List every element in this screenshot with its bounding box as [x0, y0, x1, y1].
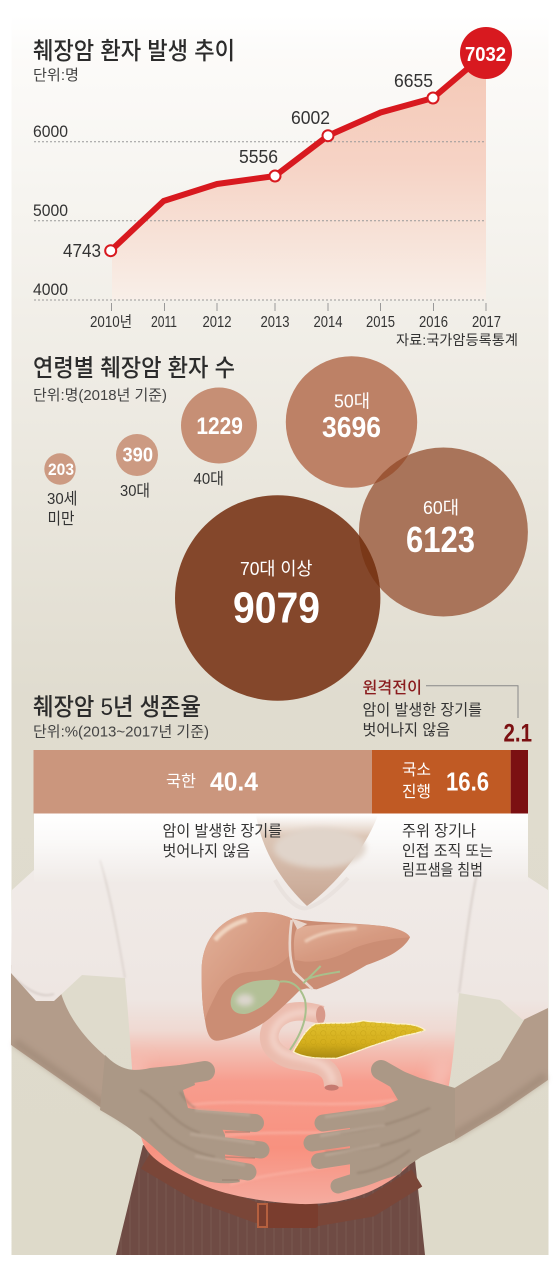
bubble: 30s: 30대 — [120, 482, 150, 500]
neck and chin — [256, 815, 378, 908]
description: localized: 암이 발생한 장기를 — [162, 822, 282, 840]
bubble: under 30 — [44, 453, 78, 528]
bile duct — [280, 966, 340, 1050]
y axis labels: 4000 — [33, 281, 68, 299]
callout: distant metastasis: 벗어나지 않음 — [362, 721, 450, 739]
pancreas — [293, 1021, 425, 1058]
title: 췌장암 5년 생존율 — [33, 694, 201, 721]
photo: man holding his abdomen with organ illustration — [11, 813, 548, 1255]
data values: 5556 — [239, 146, 278, 167]
callout: distant metastasis: 원격전이 — [362, 679, 422, 697]
y axis labels: 5000 — [33, 202, 68, 220]
organs: liver, gallbladder, duodenum, pancreas — [202, 912, 425, 1091]
y axis labels — [33, 123, 68, 299]
x axis labels: 2010년 — [90, 313, 132, 331]
description: regional: 인접 조직 또는 — [402, 842, 493, 860]
duodenum — [269, 1006, 339, 1091]
chart: patient incidence trend — [33, 27, 518, 348]
source: 자료:국가암등록통계 — [396, 332, 518, 348]
callout: distant metastasis: 2.1 — [504, 720, 532, 748]
callout: distant metastasis — [362, 679, 532, 748]
label 60s: 60대 — [423, 498, 459, 518]
value 60s: 6123 — [406, 519, 475, 560]
bubble chart: patients by age — [33, 355, 528, 701]
left hand — [100, 1055, 261, 1183]
x axis labels: 2011 — [151, 314, 177, 331]
description: regional: 림프샘을 침범 — [402, 861, 483, 879]
trend line — [111, 53, 486, 251]
unit label: 단위:명 — [33, 67, 79, 84]
data markers — [105, 92, 438, 256]
stacked bar: 국한 — [166, 773, 196, 791]
x axis labels: 2013 — [260, 314, 290, 331]
bubble: 40s: 40대 — [194, 470, 224, 488]
highlight bubble 2017 — [460, 27, 512, 79]
gallbladder — [231, 980, 280, 1014]
value 70+: 9079 — [233, 584, 320, 633]
label 50s: 50대 — [334, 392, 370, 412]
x axis labels: 2012 — [202, 314, 232, 331]
liver — [202, 912, 410, 1041]
description: localized: 벗어나지 않음 — [162, 842, 250, 860]
white fade over top of photo — [34, 813, 528, 883]
bubble: 50s — [286, 356, 417, 488]
bubble: under 30: 203 — [48, 461, 74, 479]
bubble: 40s — [181, 388, 257, 488]
arms behind the sleeves — [11, 965, 548, 1143]
bubble: 30s: 390 — [122, 445, 153, 467]
data values: 6655 — [394, 70, 433, 91]
survival section — [33, 679, 532, 879]
title: 췌장암 환자 발생 추이 — [33, 38, 235, 65]
bubble: 60s — [358, 448, 528, 616]
description: regional — [402, 822, 493, 879]
highlight bubble 2017: 7032 — [465, 44, 506, 66]
data values — [63, 70, 433, 261]
unit label: 단위:명(2018년 기준) — [33, 387, 167, 404]
bubble: 70+ — [175, 495, 380, 701]
x axis labels — [90, 313, 501, 331]
area fill under line — [112, 53, 486, 300]
stacked bar: 40.4 — [210, 767, 259, 797]
bubble: 40s: 1229 — [196, 413, 243, 440]
stacked bar: 16.6 — [446, 767, 489, 797]
stacked bar: 국소 — [402, 762, 431, 779]
bubble: under 30: 30세 — [47, 490, 78, 508]
data values: 6002 — [291, 107, 330, 128]
bubble: under 30: 미만 — [48, 510, 75, 528]
description: localized — [162, 822, 282, 860]
belt — [146, 1160, 417, 1228]
stacked bar — [34, 750, 528, 814]
x axis labels: 2017 — [472, 314, 501, 331]
x axis labels: 2016 — [419, 314, 448, 331]
label 70+: 70대 이상 — [240, 559, 312, 579]
data values: 4743 — [63, 240, 101, 261]
x axis labels: 2015 — [366, 314, 395, 331]
stacked bar: 진행 — [402, 783, 431, 801]
title: 연령별 췌장암 환자 수 — [33, 355, 235, 382]
bubble: 30s — [116, 434, 158, 500]
trousers with pinstripes — [116, 1145, 425, 1255]
description: regional: 주위 장기나 — [402, 822, 476, 840]
callout: distant metastasis: 암이 발생한 장기를 — [362, 701, 482, 719]
white T-shirt with red pain glow — [11, 813, 548, 1204]
value 50s: 3696 — [322, 412, 381, 444]
unit label: 단위:%(2013~2017년 기준) — [33, 724, 209, 741]
x axis labels: 2014 — [314, 314, 343, 331]
right hand — [312, 1068, 455, 1190]
y axis labels: 6000 — [33, 123, 68, 141]
